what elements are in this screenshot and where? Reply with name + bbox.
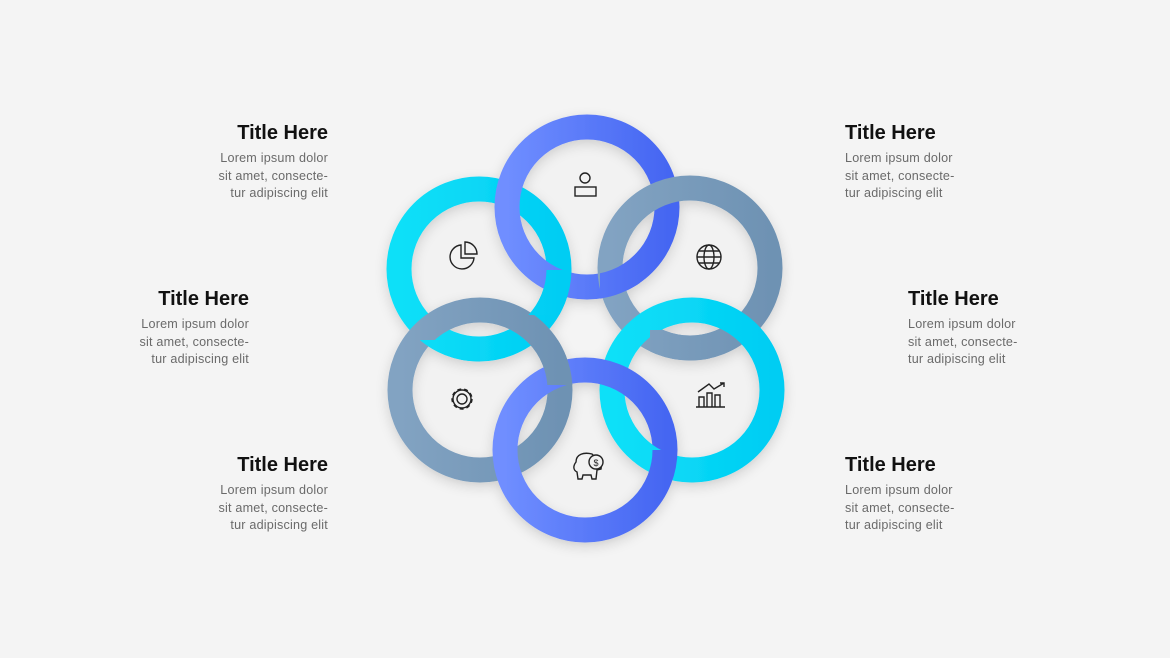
icon: person	[575, 173, 596, 196]
icon: pie chart	[450, 242, 477, 269]
text block: left middle: tur adipiscing elit	[151, 352, 249, 366]
text block: left bottom: tur adipiscing elit	[230, 518, 328, 532]
text block: right bottom: Lorem ipsum dolor	[845, 483, 953, 497]
text block: right bottom: Title Here	[845, 454, 936, 476]
text block: right top: Title Here	[845, 122, 936, 144]
text block: right top: Lorem ipsum dolor	[845, 151, 953, 165]
text block: right middle: Title Here	[908, 288, 999, 310]
text block: right top: tur adipiscing elit	[845, 186, 943, 200]
text block: left bottom: Title Here	[237, 454, 328, 476]
text block: right bottom	[845, 454, 954, 532]
icon: globe	[697, 245, 721, 269]
text block: right middle: Lorem ipsum dolor	[908, 317, 1016, 331]
icon: piggy bank: $	[593, 458, 599, 468]
text block: right middle: sit amet, consecte-	[908, 335, 1018, 349]
text block: left middle: Title Here	[158, 288, 249, 310]
text block: left bottom: sit amet, consecte-	[218, 501, 328, 515]
text block: left top: Lorem ipsum dolor	[220, 151, 328, 165]
text block: left top	[218, 122, 328, 200]
text block: left bottom	[218, 454, 328, 532]
icons	[450, 173, 725, 479]
text block: right top	[845, 122, 954, 200]
text block: left middle: sit amet, consecte-	[140, 335, 249, 349]
text block: left bottom: Lorem ipsum dolor	[220, 483, 328, 497]
weave overlays	[420, 249, 710, 450]
text block: right middle: tur adipiscing elit	[908, 352, 1006, 366]
icon: gear	[452, 389, 472, 409]
text block: right bottom: sit amet, consecte-	[845, 501, 954, 515]
text block: left top: sit amet, consecte-	[218, 169, 328, 183]
text block: right bottom: tur adipiscing elit	[845, 518, 943, 532]
icon: bar chart	[696, 383, 725, 407]
rings	[399, 127, 772, 530]
text block: right middle	[908, 288, 1018, 366]
text block: left top: Title Here	[237, 122, 328, 144]
ring diagram	[382, 114, 789, 551]
inner discs	[399, 127, 772, 530]
text block: left top: tur adipiscing elit	[230, 186, 328, 200]
text block: right top: sit amet, consecte-	[845, 169, 954, 183]
text block: left middle	[140, 288, 249, 366]
icon: piggy bank	[574, 453, 603, 479]
text block: left middle: Lorem ipsum dolor	[141, 317, 249, 331]
